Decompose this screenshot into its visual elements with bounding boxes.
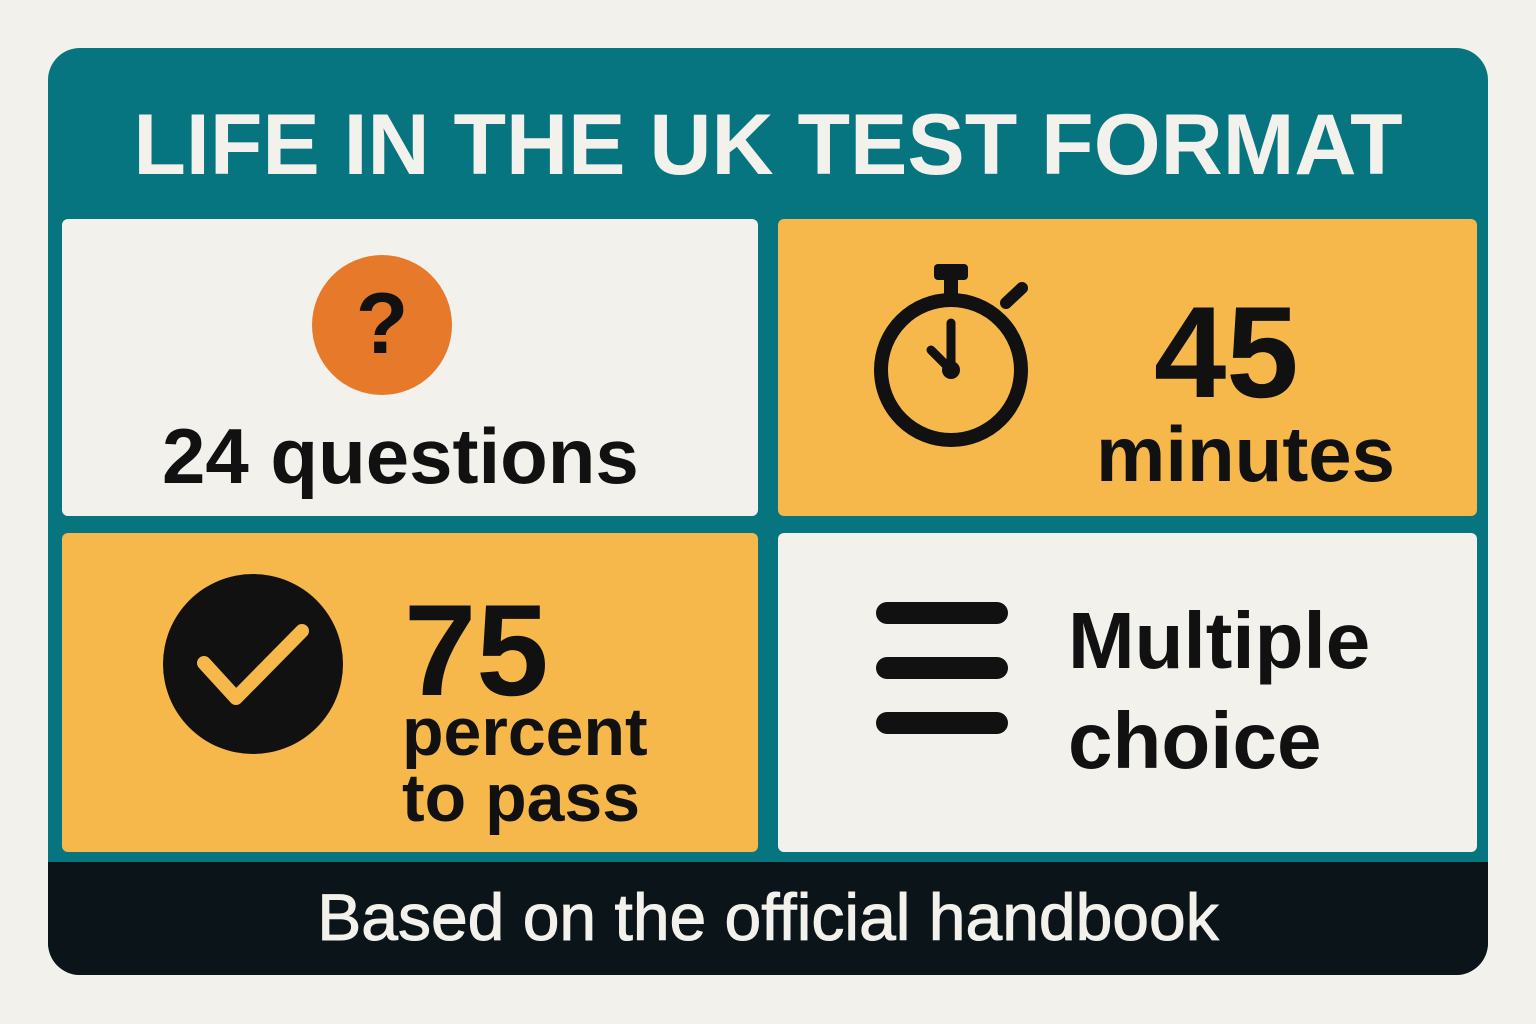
text: Multiple choice: Multiple bbox=[1068, 596, 1370, 685]
panel: time bbox=[778, 219, 1477, 516]
text: 45 minutes: 45 bbox=[1154, 279, 1299, 425]
icon: question: ? bbox=[356, 276, 408, 372]
icon: check bbox=[163, 574, 343, 754]
panel: time: minutes bbox=[1096, 410, 1395, 498]
icon: list lines bbox=[876, 602, 1008, 734]
panel: pass mark: percent bbox=[402, 694, 648, 770]
footer bbox=[48, 862, 1488, 975]
panel: multiple choice bbox=[778, 533, 1477, 852]
text: 24 questions: 24 questions bbox=[162, 412, 639, 500]
panel: pass mark bbox=[62, 533, 758, 852]
panel: pass mark: to pass bbox=[402, 760, 640, 836]
icon: stopwatch bbox=[874, 264, 1028, 447]
icon: question bbox=[312, 255, 452, 395]
text: 75 percent to pass: 75 bbox=[404, 577, 549, 723]
panel: questions bbox=[62, 219, 758, 516]
text: Multiple choice bbox=[1068, 596, 1370, 785]
title: LIFE IN THE UK TEST FORMAT bbox=[133, 97, 1403, 193]
footer: Based on the official handbook bbox=[317, 880, 1219, 954]
text: Multiple choice: choice bbox=[1068, 696, 1321, 785]
